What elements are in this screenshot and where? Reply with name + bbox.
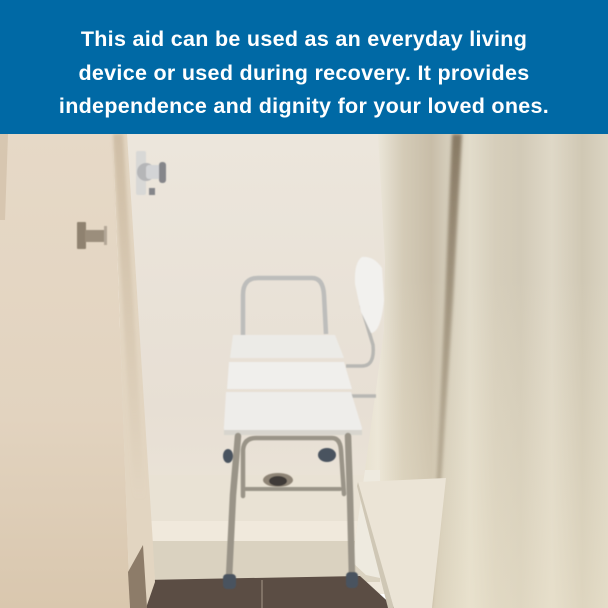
seat slat 3 <box>224 392 362 432</box>
shower curb <box>150 521 380 582</box>
caption line 3: independence and dignity for your loved ones. <box>59 94 549 118</box>
legs <box>229 436 352 578</box>
floor drain <box>263 473 293 487</box>
left wall <box>0 134 130 608</box>
backrest <box>355 257 384 333</box>
icon: wall hook <box>77 222 107 249</box>
header banner <box>0 0 608 134</box>
side backrest bracket <box>346 305 376 396</box>
caption line 1: This aid can be used as an everyday living <box>81 27 527 51</box>
icon: shower valve <box>136 151 166 195</box>
shower back wall <box>120 134 395 594</box>
seat slat 2 <box>227 362 352 389</box>
rubber feet <box>223 448 358 589</box>
door jamb <box>113 134 155 608</box>
seat slat 1 <box>230 335 344 358</box>
shower curtain <box>352 134 608 608</box>
caption line 2: device or used during recovery. It provides <box>78 61 530 85</box>
floor tiles <box>143 576 395 608</box>
white ledge <box>357 478 446 608</box>
shower chair <box>223 257 384 589</box>
back rail <box>243 278 326 335</box>
